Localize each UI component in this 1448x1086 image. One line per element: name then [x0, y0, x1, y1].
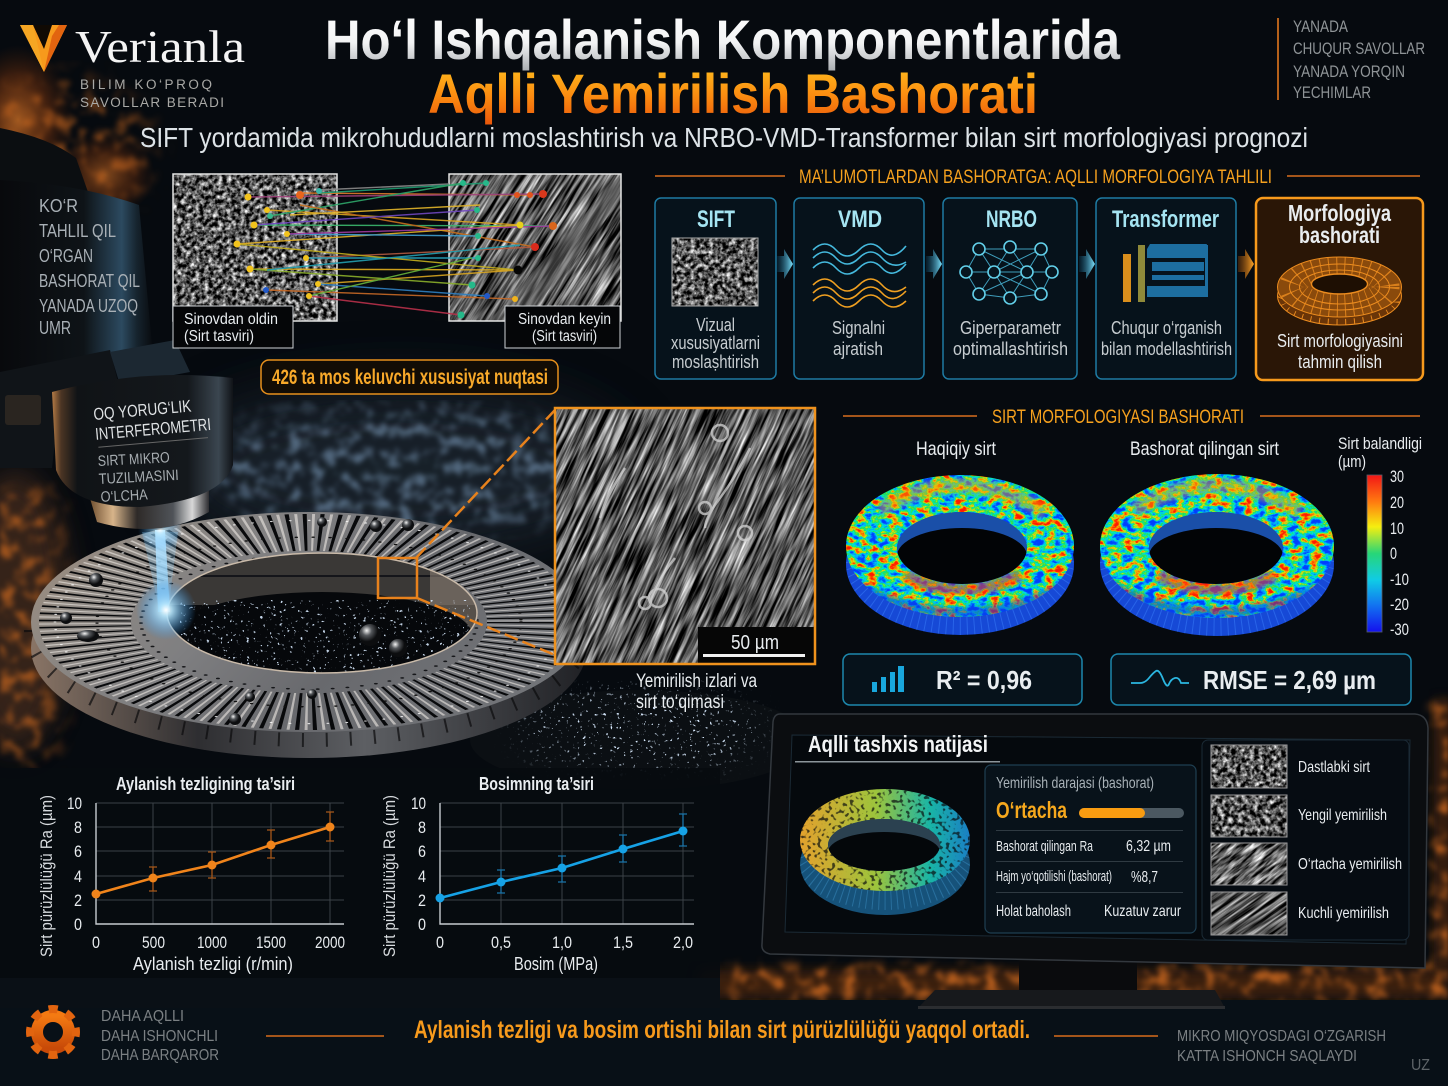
panel: monitor with diagnosis result — [762, 714, 1428, 1009]
line chart: effect of rotation speed: 1500 — [256, 933, 286, 952]
step: Transformer — [1096, 198, 1236, 379]
lower lens drum with label: SIRT MIKRO — [97, 449, 170, 470]
step: NRBO: NRBO — [986, 206, 1037, 233]
3D ring on screen — [795, 785, 975, 915]
line chart: effect of pressure: 2 — [418, 891, 426, 910]
line chart: effect of pressure: Bosimning ta’siri — [479, 774, 594, 794]
upper lens body with action words: BASHORAT QIL — [39, 271, 140, 291]
line chart: effect of rotation speed: 0 — [74, 915, 82, 934]
step: morphology prediction — [1256, 198, 1423, 380]
callout: 426 matched points: 426 ta mos keluvchi xususiyat nuqtasi — [272, 366, 548, 389]
wear level bar — [1079, 808, 1184, 818]
color scale legend: 30 — [1390, 467, 1404, 486]
line chart: effect of pressure: 2,0 — [673, 933, 693, 952]
line chart: effect of rotation speed: 1000 — [197, 933, 227, 952]
step: morphology prediction: Morfologiya — [1288, 200, 1391, 226]
color scale legend: 20 — [1390, 493, 1404, 512]
footer tagline right: MIKRO MIQYOSDAGI O‘ZGARISH — [1177, 1028, 1386, 1045]
panel: wear level card: %8,7 — [1131, 869, 1158, 886]
line chart: effect of rotation speed: 2 — [74, 891, 82, 910]
data series — [436, 826, 688, 902]
metric: R squared: R² = 0,96 — [936, 665, 1032, 695]
icon: orange V mark — [20, 25, 67, 72]
callout: 426 matched points — [261, 360, 558, 394]
line chart: effect of pressure: 10 — [411, 794, 426, 813]
data series — [92, 822, 334, 898]
title: Ho‘l Ishqalanish Komponentlarida — [325, 8, 1121, 71]
line chart: effect of pressure: 0 — [418, 915, 426, 934]
color scale legend: 10 — [1390, 519, 1404, 538]
label: true surface: Haqiqiy sirt — [916, 439, 997, 460]
feature match lines — [237, 183, 553, 315]
selected area marker and connector lines — [378, 410, 555, 655]
language tag: UZ — [1411, 1057, 1430, 1074]
lower lens drum with label — [52, 375, 233, 507]
line chart: effect of rotation speed: 500 — [142, 933, 165, 952]
line chart: effect of rotation speed: 10 — [67, 794, 82, 813]
color scale legend: (µm) — [1338, 452, 1366, 471]
footer divider right — [1054, 1035, 1158, 1037]
color scale legend: -10 — [1390, 570, 1409, 589]
subtitle: SIFT yordamida mikrohududlarni moslashtirish va NRBO-VMD-Transformer bilan sirt morfologiyasi prognozi — [140, 122, 1308, 153]
key conclusion: Aylanish tezligi va bosim ortishi bilan sirt pürüzlülüğü yaqqol ortadi. — [414, 1016, 1030, 1044]
label: predicted surface: Bashorat qilingan sirt — [1130, 439, 1280, 460]
step: SIFT: xususiyatlarni — [671, 333, 760, 353]
line chart: effect of pressure: 6 — [418, 842, 426, 861]
step: morphology prediction: Sirt morfologiyasini — [1277, 331, 1403, 351]
line chart: effect of pressure: 8 — [418, 818, 426, 837]
color scale legend: -30 — [1390, 620, 1409, 639]
lens nozzle — [89, 490, 209, 529]
step: morphology prediction: bashorati — [1299, 222, 1380, 248]
3D heat ring: true surface — [840, 470, 1080, 635]
icon: orange gear — [30, 1009, 76, 1055]
lower lens drum with label: TUZILMASINI — [98, 467, 179, 488]
top-right tagline: YANADA — [1293, 17, 1349, 36]
panel: data to prediction pipeline — [655, 167, 1423, 380]
metric: RMSE — [1111, 654, 1411, 705]
SEM image — [381, 231, 992, 842]
step: SIFT: Vizual — [696, 315, 735, 335]
icon: wave — [1131, 671, 1189, 686]
color scale legend: Sirt balandligi — [1338, 434, 1422, 453]
upper lens body with action words: TAHLIL QIL — [39, 221, 116, 241]
top-right tagline: YECHIMLAR — [1293, 83, 1371, 102]
line chart: effect of pressure: Sirt pürüzlülüğü Ra (µm) — [380, 795, 399, 957]
image: surface after test — [345, 46, 758, 459]
arrow — [1079, 249, 1095, 279]
panel: wear ring photograph — [20, 500, 600, 758]
ring inner hole with liquid — [167, 552, 478, 674]
lower lens drum with label: INTERFEROMETRI — [94, 415, 212, 444]
thumbnail: initial surface — [1211, 745, 1370, 788]
inset caption: Yemirilish izlari va — [636, 671, 757, 692]
feature points — [234, 180, 557, 318]
brand slogan: BILIM KO‘PROQ — [80, 77, 212, 92]
lower lens drum with label: OQ YORUG‘LIK — [93, 396, 192, 424]
panel: wear level card: Bashorat qilingan Ra — [996, 838, 1093, 855]
upper lens body with action words: YANADA UZOQ — [39, 296, 138, 316]
line chart: effect of pressure: Bosim (MPa) — [514, 954, 598, 974]
step: NRBO: optimallashtirish — [953, 339, 1068, 359]
thumbnail: heavy wear: Kuchli yemirilish — [1298, 905, 1389, 922]
label: after test: (Sirt tasviri) — [532, 328, 597, 345]
ring top surface — [31, 512, 564, 732]
line chart: effect of pressure: 1,0 — [552, 933, 572, 952]
scale bar — [703, 632, 805, 657]
light beam from interferometer — [136, 508, 196, 640]
step: Transformer: Chuqur o‘rganish — [1111, 318, 1222, 338]
step: VMD: ajratish — [833, 339, 883, 359]
arrow — [926, 249, 942, 279]
footer tagline left: DAHA BARQAROR — [101, 1047, 219, 1064]
line chart: effect of rotation speed: 6 — [74, 842, 82, 861]
brand slogan: SAVOLLAR BERADI — [80, 95, 224, 110]
lower lens drum with label: O‘LCHA — [100, 486, 148, 506]
step: VMD: VMD — [838, 206, 882, 233]
footer tagline right: KATTA ISHONCH SAQLAYDI — [1177, 1048, 1357, 1065]
arrow — [777, 249, 793, 279]
line chart: effect of rotation speed: Sirt pürüzlülüğü Ra (µm) — [37, 795, 56, 957]
line chart: effect of rotation speed: Aylanish tezligining ta’siri — [116, 774, 295, 794]
label: before test: (Sirt tasviri) — [184, 328, 254, 345]
metric: RMSE: RMSE = 2,69 µm — [1203, 665, 1376, 695]
footer tagline right — [1177, 1028, 1386, 1065]
section heading: MA’LUMOTLARDAN BASHORATGA: AQLLI MORFOLOGIYA TAHLILI — [799, 167, 1272, 188]
line chart: effect of pressure: 0,5 — [491, 933, 511, 952]
line chart: effect of rotation speed: 0 — [92, 933, 100, 952]
arrow — [1238, 249, 1254, 279]
thumbnail: initial surface: Dastlabki sirt — [1298, 759, 1370, 776]
water droplets on the ring — [60, 517, 414, 725]
line chart: effect of rotation speed: Aylanish tezligi (r/min) — [133, 954, 293, 974]
thumbnail: light wear: Yengil yemirilish — [1298, 807, 1387, 824]
upper lens body with action words: KO‘R — [39, 196, 78, 216]
3D heat ring: predicted surface — [1095, 470, 1340, 636]
panel: wear stage thumbnails — [1158, 736, 1409, 1000]
top-right tagline — [1277, 17, 1425, 102]
line chart: effect of rotation speed: 2000 — [315, 933, 345, 952]
step: SIFT — [655, 198, 776, 379]
step: VMD — [794, 198, 924, 379]
line chart: effect of pressure: 0 — [436, 933, 444, 952]
footer tagline left: DAHA ISHONCHLI — [101, 1028, 218, 1045]
icon: signal bars — [872, 666, 904, 692]
thumbnail: moderate wear: O‘rtacha yemirilish — [1298, 856, 1402, 873]
monitor stand — [918, 960, 1225, 1009]
panel: interferometer lens housing — [0, 128, 233, 529]
panel: wear level card: 6,32 µm — [1126, 838, 1171, 855]
line chart: effect of rotation speed — [37, 774, 345, 974]
panel: wear level card: Holat baholash — [996, 903, 1071, 920]
panel: surface morphology prediction — [840, 407, 1422, 705]
thumbnail: heavy wear — [1158, 822, 1389, 1000]
line chart: effect of rotation speed: 8 — [74, 818, 82, 837]
label: after test: Sinovdan keyin — [518, 311, 611, 328]
step: SIFT: SIFT — [697, 206, 735, 233]
error bars — [149, 812, 334, 891]
label: before test: Sinovdan oldin — [184, 311, 278, 328]
panel: SEM magnified inset — [378, 231, 992, 842]
panel: wear level card: Kuzatuv zarur — [1104, 903, 1182, 920]
step: SIFT: moslaṣhtirish — [672, 352, 759, 372]
step: morphology prediction: tahmin qilish — [1298, 352, 1382, 372]
upper lens body with action words — [0, 180, 152, 376]
scale bar: 50 µm — [731, 632, 779, 654]
line chart: effect of rotation speed: 4 — [74, 867, 82, 886]
step: NRBO: Giperparametr — [960, 318, 1061, 338]
panel: wear level card: Hajm yo‘qotilishi (bashorat) — [996, 868, 1112, 885]
error bars — [497, 814, 687, 893]
upper lens body with action words: UMR — [39, 318, 71, 338]
thumbnail: light wear — [1165, 736, 1387, 892]
panel: wear level card — [985, 765, 1196, 933]
monitor screen — [785, 735, 1410, 944]
label: after test — [505, 306, 620, 348]
ring outer side wall — [31, 538, 587, 758]
footer tagline left — [101, 1008, 219, 1064]
brand slogan — [80, 77, 224, 110]
line chart: effect of pressure — [380, 774, 694, 974]
upper lens body with action words: O‘RGAN — [39, 246, 93, 266]
color scale legend: 0 — [1390, 544, 1397, 563]
panel: wear level card: Yemirilish darajasi (bashorat) — [996, 775, 1154, 792]
footer divider left — [266, 1035, 384, 1037]
step: NRBO — [943, 198, 1077, 379]
image: surface before test — [173, 174, 337, 321]
inset caption — [636, 671, 757, 713]
top-right tagline: YANADA YORQIN — [1293, 62, 1405, 81]
title: Aqlli Yemirilish Bashorati — [428, 62, 1038, 125]
icon: wireframe torus — [1278, 257, 1402, 326]
monitor bezel — [762, 714, 1428, 968]
thumbnail: moderate wear — [1158, 771, 1402, 953]
screen heading: Aqlli tashxis natijasi — [808, 731, 988, 757]
step: Transformer: Transformer — [1112, 206, 1219, 233]
step: VMD: Signalni — [832, 318, 885, 338]
color scale legend — [1338, 434, 1422, 639]
footer tagline left: DAHA AQLLI — [101, 1008, 184, 1025]
title — [325, 8, 1121, 125]
line chart: effect of pressure: 1,5 — [613, 933, 633, 952]
panel: SIFT before and after matching — [173, 46, 758, 459]
brand name: Verianla — [75, 21, 245, 72]
logo: Verianla — [20, 21, 245, 110]
panel: wear level card: O‘rtacha — [996, 797, 1067, 823]
metric: R squared — [843, 654, 1082, 705]
step: Transformer: bilan modellashtirish — [1101, 339, 1232, 359]
inset caption: sirt to‘qimasi — [636, 692, 724, 713]
label: before test — [173, 306, 293, 348]
section heading: SIRT MORFOLOGIYASI BASHORATI — [992, 407, 1244, 428]
line chart: effect of pressure: 4 — [418, 867, 426, 886]
color scale legend: -20 — [1390, 595, 1409, 614]
